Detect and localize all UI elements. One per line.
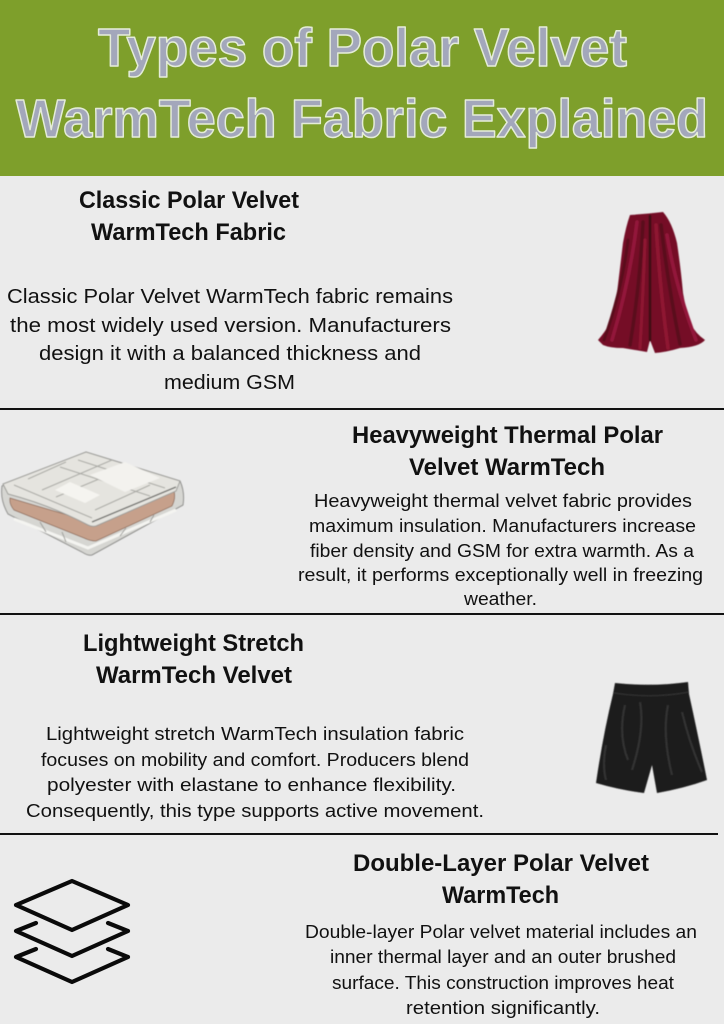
text block: double-layer: Double-layer Polar velvet material includes an — [305, 922, 697, 942]
heading: double-layer: WarmTech — [442, 882, 559, 909]
title — [16, 18, 708, 149]
heading: double-layer — [353, 850, 649, 909]
heading: classic — [79, 187, 299, 246]
heading: classic: Classic Polar Velvet — [79, 187, 299, 214]
text block: heavyweight: maximum insulation. Manufacturers increase — [309, 516, 696, 536]
text block: lightweight: Consequently, this type supports active movement. — [26, 801, 484, 821]
icon: stacked layers — [16, 881, 128, 982]
panel: lightweight stretch — [26, 630, 707, 821]
icon: black shorts — [596, 682, 707, 793]
text block: heavyweight: result, it performs exceptionally well in freezing — [298, 565, 703, 585]
heading: classic: WarmTech Fabric — [91, 219, 286, 246]
text block: double-layer: retention significantly. — [406, 998, 600, 1018]
text block: double-layer: inner thermal layer and an outer brushed — [330, 947, 676, 967]
text block: heavyweight: weather. — [463, 589, 537, 609]
text block: classic: the most widely used version. Manufacturers — [10, 315, 451, 337]
icon: folded silver blanket — [2, 452, 184, 555]
heading: heavyweight: Velvet WarmTech — [409, 454, 605, 481]
heading: lightweight: WarmTech Velvet — [96, 662, 292, 689]
text block: lightweight: polyester with elastane to enhance flexibility. — [47, 775, 456, 795]
text block: classic: design it with a balanced thickness and — [39, 343, 421, 365]
panel: double-layer — [16, 850, 697, 1018]
heading: heavyweight: Heavyweight Thermal Polar — [352, 422, 663, 449]
panel: heavyweight thermal — [2, 422, 703, 609]
title: WarmTech Fabric Explained — [16, 89, 708, 149]
panel: classic polar velvet — [7, 187, 705, 394]
text block: classic — [7, 286, 453, 394]
header banner — [0, 0, 724, 176]
text block: double-layer — [305, 922, 697, 1018]
heading: lightweight — [83, 630, 304, 689]
text block: heavyweight: Heavyweight thermal velvet fabric provides — [314, 491, 692, 511]
text block: heavyweight: fiber density and GSM for extra warmth. As a — [310, 541, 695, 561]
text block: classic: Classic Polar Velvet WarmTech fabric remains — [7, 286, 453, 308]
divider — [0, 833, 718, 835]
text block: double-layer: surface. This construction improves heat — [332, 973, 674, 993]
heading: lightweight: Lightweight Stretch — [83, 630, 304, 657]
heading: double-layer: Double-Layer Polar Velvet — [353, 850, 649, 877]
text block: heavyweight — [298, 491, 703, 609]
divider — [0, 408, 724, 410]
text block: lightweight — [26, 724, 484, 821]
text block: lightweight: focuses on mobility and comfort. Producers blend — [41, 750, 469, 770]
heading: heavyweight — [352, 422, 663, 481]
divider — [0, 613, 724, 615]
icon: red velvet cape — [598, 212, 705, 353]
text block: classic: medium GSM — [164, 372, 295, 394]
title: Types of Polar Velvet — [98, 18, 627, 78]
text block: lightweight: Lightweight stretch WarmTech insulation fabric — [46, 724, 464, 744]
